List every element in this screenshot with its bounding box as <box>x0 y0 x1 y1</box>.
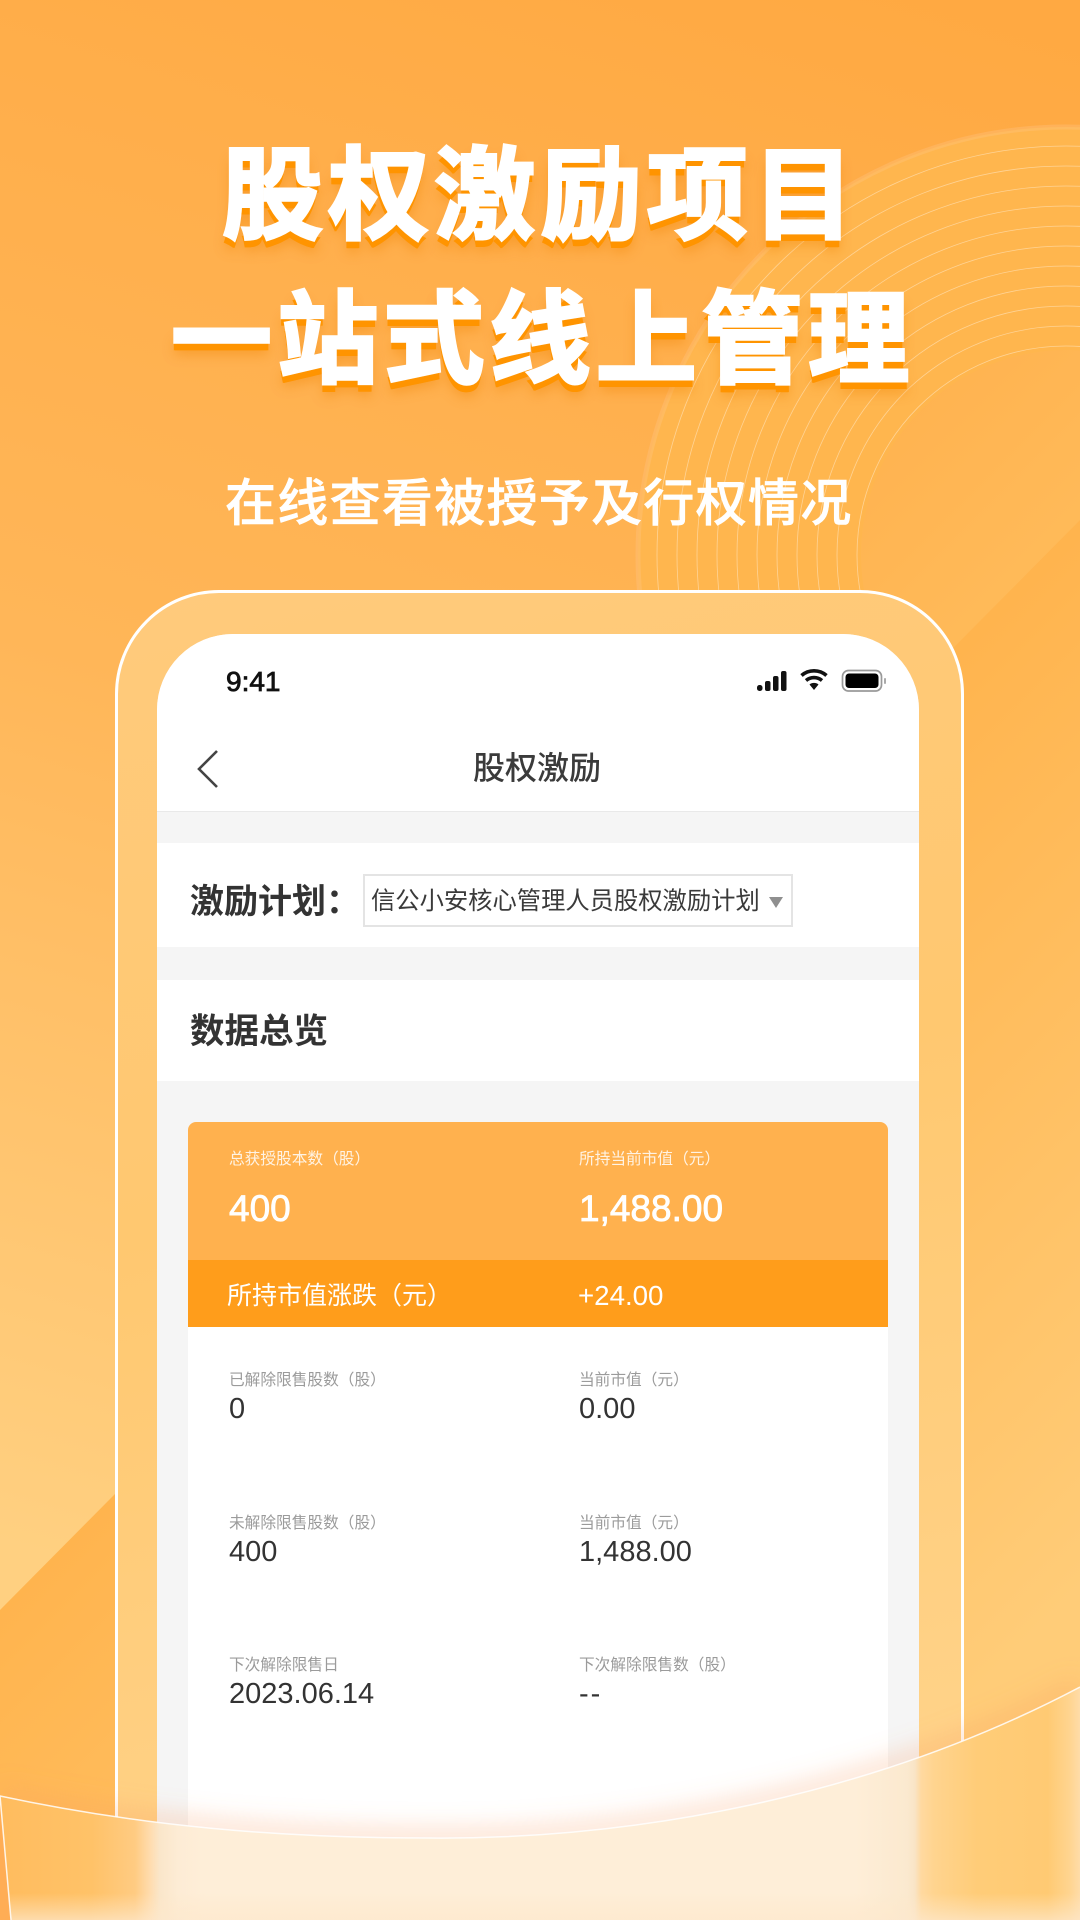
change value: +24.00 <box>578 1280 663 1311</box>
dropdown arrow <box>769 897 783 908</box>
plan select box <box>363 874 793 927</box>
locked value <box>579 1514 692 1568</box>
value: 0 <box>229 1393 245 1425</box>
back arrow <box>197 750 218 788</box>
plan name: 信公小安核心管理人员股权激励计划 <box>371 888 760 915</box>
data card <box>188 1122 888 1920</box>
title line 2: 一站式线上管理 <box>171 285 914 397</box>
label: 未解除限售股数（股） <box>229 1515 386 1532</box>
total shares value: 400 <box>229 1188 291 1229</box>
change strip <box>188 1260 888 1327</box>
subtitle: 在线查看被授予及行权情况 <box>225 475 853 532</box>
title line 1: 股权激励项目 <box>222 141 859 253</box>
label: 当前市值（元） <box>579 1515 689 1532</box>
label: 下次解除限售日 <box>229 1657 339 1674</box>
status and navigation bar <box>157 634 919 812</box>
label: 已解除限售股数（股） <box>229 1372 386 1389</box>
phone mockup <box>115 590 964 1920</box>
next release shares <box>579 1656 736 1710</box>
label: 当前市值（元） <box>579 1372 689 1389</box>
market value number: 1,488.00 <box>579 1188 723 1229</box>
value: 400 <box>229 1536 277 1568</box>
heading text: 数据总览 <box>190 1013 328 1051</box>
plan label: 激励计划： <box>190 883 360 921</box>
incentive plan row <box>157 843 919 947</box>
screen title: 股权激励 <box>473 750 601 786</box>
total shares label: 总获授股本数（股） <box>229 1151 370 1168</box>
clock: 9:41 <box>226 666 280 697</box>
label: 下次解除限售数（股） <box>579 1657 736 1674</box>
locked shares <box>229 1514 386 1568</box>
market value label: 所持当前市值（元） <box>579 1151 720 1168</box>
released shares <box>229 1371 386 1425</box>
title <box>171 141 914 402</box>
phone screen <box>157 634 919 1920</box>
value: 2023.06.14 <box>229 1678 374 1710</box>
next release date <box>229 1656 374 1710</box>
card header <box>188 1122 888 1260</box>
value: 1,488.00 <box>579 1536 692 1568</box>
data overview heading <box>157 980 919 1081</box>
released value <box>579 1371 689 1425</box>
change label: 所持市值涨跌（元） <box>227 1282 452 1310</box>
status icons <box>757 669 886 692</box>
value: 0.00 <box>579 1393 635 1425</box>
value: -- <box>579 1678 602 1710</box>
